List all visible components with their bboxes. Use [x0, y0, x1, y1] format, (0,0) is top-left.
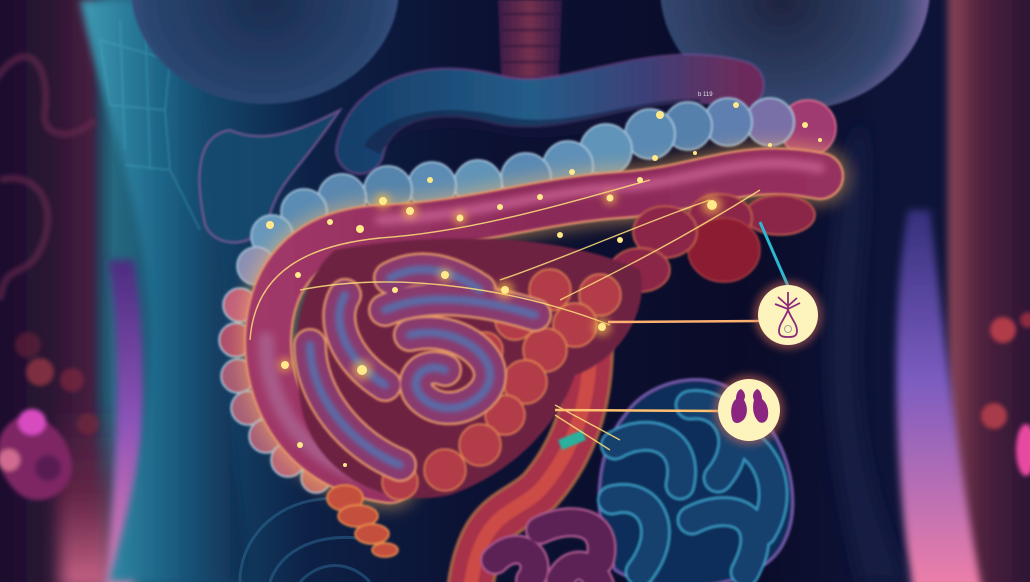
- organ: right upper bulb: [660, 0, 930, 110]
- organ: rectum descending tube: [470, 345, 590, 582]
- panel: left side vessels: [0, 57, 99, 435]
- organ: folded small intestine mass: [296, 238, 642, 498]
- organ: left upper bulb: [131, 0, 399, 104]
- torso: teal left flank: [80, 0, 246, 582]
- organ: right colon lobes: [610, 194, 815, 292]
- organ: blue haustra along colon: [219, 98, 836, 493]
- organ: teal duct spot: [558, 430, 586, 450]
- panel: right side spots: [981, 312, 1030, 476]
- callout line: lower icon: [555, 410, 722, 411]
- organ: lower left faint loops: [240, 498, 370, 582]
- glowing nerve lines: [250, 180, 760, 450]
- icon: paired organs badge: [714, 375, 784, 445]
- organ: esophagus: [498, 0, 562, 100]
- golden sparkle glow: [278, 191, 722, 380]
- organ: large intestine: [266, 163, 820, 480]
- organ: lower purple knot: [495, 522, 602, 582]
- icon: left pink organ: [0, 409, 72, 500]
- label: tiny text: b 119: [698, 92, 713, 98]
- organ: stomach tube: [360, 78, 740, 150]
- torso: right muscle shading: [827, 120, 905, 582]
- organ: scalloped small intestine lobes: [382, 269, 621, 500]
- golden sparkles: [266, 102, 822, 467]
- callout line: teal connector: [760, 222, 788, 286]
- icon: duct and sac badge: [754, 281, 822, 349]
- callout line: upper icon: [608, 321, 760, 322]
- organ: liver outline left: [199, 110, 340, 243]
- panel: ribcage texture: [100, 10, 200, 230]
- organ: dark blue small intestine: [599, 380, 793, 582]
- organ: lower ribbed tube: [327, 485, 398, 557]
- organ: purple-blue coiled small intestine: [310, 269, 535, 465]
